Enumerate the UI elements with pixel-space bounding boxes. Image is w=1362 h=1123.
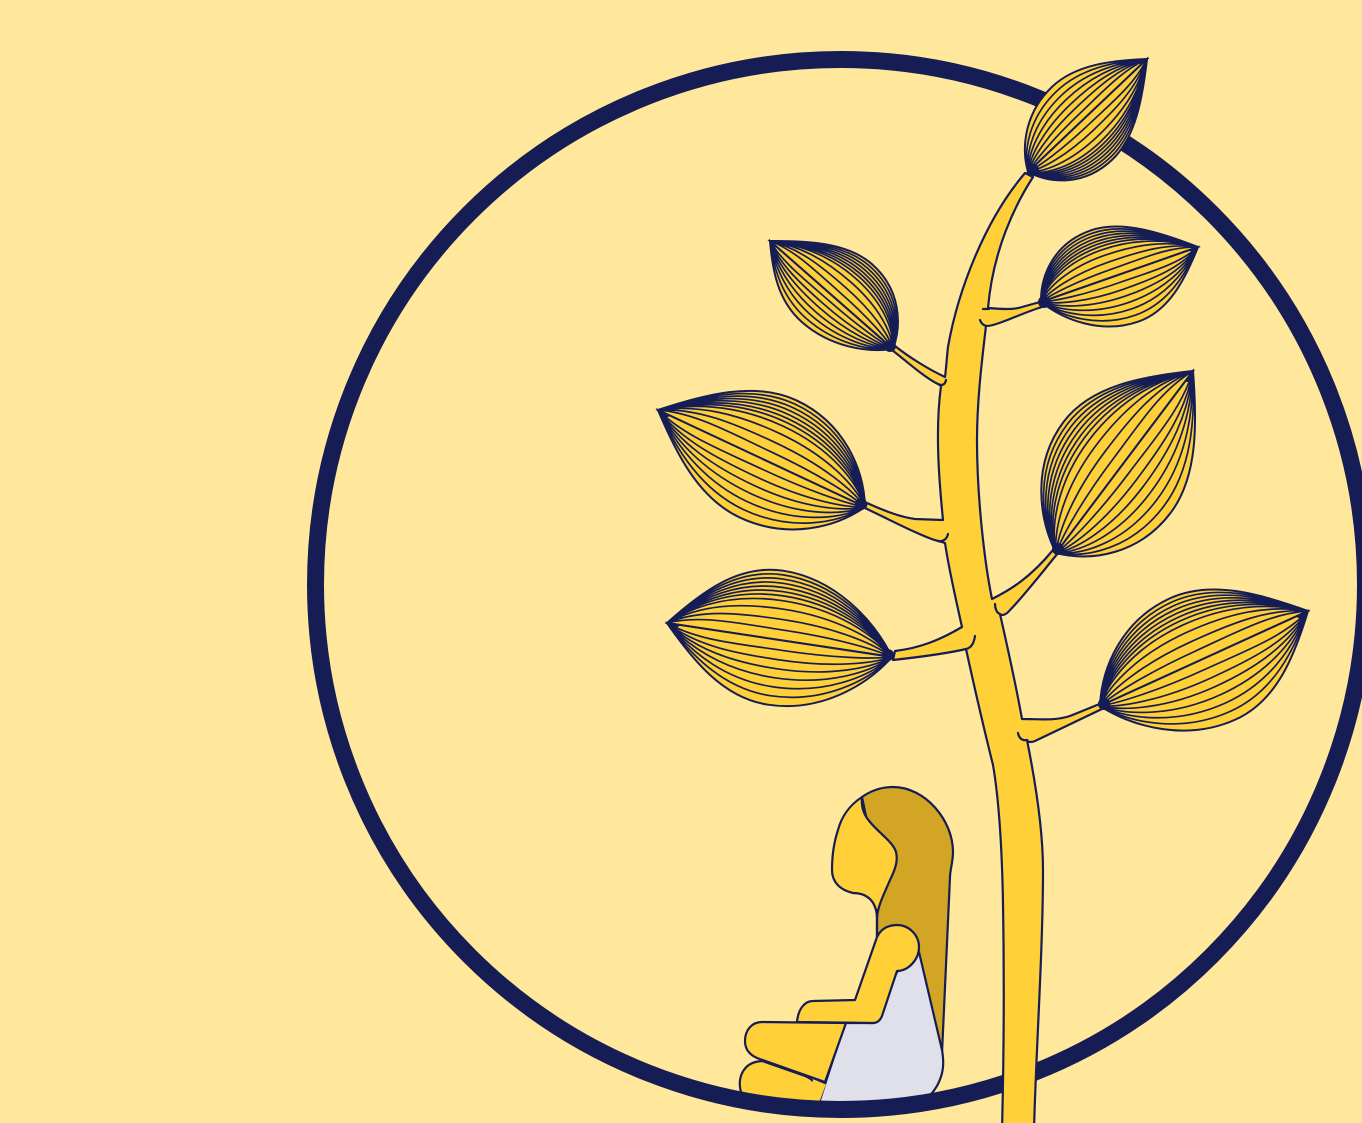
knee gap [806,1080,826,1103]
hair [862,787,953,1053]
arm [797,925,919,1023]
leaf: lower right [1070,549,1344,765]
figure: seated person [740,787,953,1106]
gap line [813,1078,825,1083]
leaf: upper left [738,208,931,374]
lower leg [740,1061,815,1106]
thigh [745,1022,846,1082]
dress [818,952,943,1106]
leaf: upper right [1015,202,1220,348]
leaf: top [995,28,1174,214]
leaf: middle right [998,327,1242,600]
face [832,797,897,917]
ring [316,60,1362,1110]
branch joint hooks [938,309,1027,740]
leaf: lower left [651,553,894,721]
leaf: middle left [632,350,896,564]
neck line [876,910,878,937]
plant stem with branches [865,173,1104,1123]
